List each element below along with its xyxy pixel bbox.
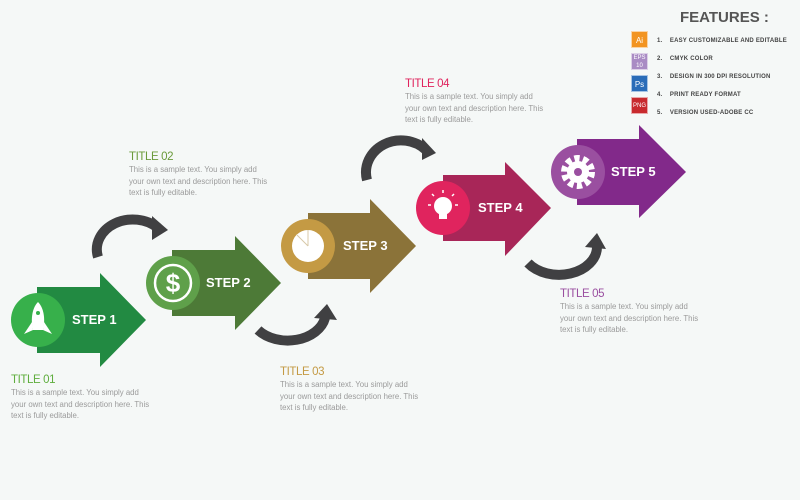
step 3 bbox=[281, 199, 416, 293]
text: your own text and description here. This bbox=[11, 400, 149, 408]
text: text is fully editable. bbox=[129, 188, 197, 197]
features panel: EPS bbox=[633, 55, 646, 61]
text: This is a sample text. You simply add bbox=[405, 92, 533, 101]
step 2: STEP 2 bbox=[206, 275, 251, 290]
text: This is a sample text. You simply add bbox=[280, 380, 408, 389]
text: text is fully editable. bbox=[11, 411, 79, 420]
text: text is fully editable. bbox=[405, 115, 473, 124]
text block: title 02 bbox=[129, 151, 267, 197]
text block: title 03 bbox=[280, 366, 418, 412]
features panel: FEATURES : bbox=[680, 9, 769, 26]
features panel: 3. DESIGN IN 300 DPI RESOLUTION bbox=[657, 74, 770, 80]
features panel: 5. VERSION USED-ADOBE CC bbox=[657, 110, 753, 116]
text: TITLE 04 bbox=[405, 78, 449, 90]
step 4 bbox=[416, 162, 551, 256]
text: This is a sample text. You simply add bbox=[129, 165, 257, 174]
text: TITLE 03 bbox=[280, 366, 324, 378]
features panel: Ps bbox=[635, 80, 644, 89]
text: your own text and description here. This bbox=[405, 104, 543, 112]
text: TITLE 05 bbox=[560, 288, 604, 300]
text: your own text and description here. This bbox=[129, 176, 267, 186]
arrow: curve 3 to 4 bbox=[366, 138, 436, 180]
text: This is a sample text. You simply add bbox=[11, 388, 139, 397]
text block: title 01 bbox=[11, 374, 149, 420]
step 2: $ bbox=[166, 268, 181, 298]
features panel: Ai bbox=[636, 36, 643, 45]
step 1 bbox=[11, 273, 146, 367]
text block: title 04 bbox=[405, 78, 543, 124]
text: text is fully editable. bbox=[280, 403, 348, 412]
arrow: curve 1 to 2 bbox=[97, 216, 168, 257]
step 3: STEP 3 bbox=[343, 238, 388, 253]
text block: title 05 bbox=[560, 288, 698, 334]
text: your own text and description here. This bbox=[560, 314, 698, 322]
features panel: 10 bbox=[636, 63, 643, 69]
text: TITLE 01 bbox=[11, 374, 55, 386]
features panel: 4. PRINT READY FORMAT bbox=[657, 92, 741, 98]
step 5 bbox=[551, 125, 686, 218]
features panel: 2. CMYK COLOR bbox=[657, 56, 713, 62]
features panel: 1. EASY CUSTOMIZABLE AND EDITABLE bbox=[657, 38, 787, 44]
arrow: curve 2 to 3 bbox=[258, 304, 337, 341]
features panel: PNG bbox=[633, 103, 646, 109]
arrow: curve 4 to 5 bbox=[528, 233, 606, 275]
icon: rocket bbox=[24, 302, 52, 334]
text: TITLE 02 bbox=[129, 151, 173, 163]
step 5: STEP 5 bbox=[611, 164, 656, 179]
text: your own text and description here. This bbox=[280, 392, 418, 400]
features panel bbox=[631, 9, 787, 116]
step 2 bbox=[146, 236, 281, 330]
step 4: STEP 4 bbox=[478, 200, 523, 215]
text: text is fully editable. bbox=[560, 325, 628, 334]
text: This is a sample text. You simply add bbox=[560, 302, 688, 311]
step 1: STEP 1 bbox=[72, 312, 117, 327]
